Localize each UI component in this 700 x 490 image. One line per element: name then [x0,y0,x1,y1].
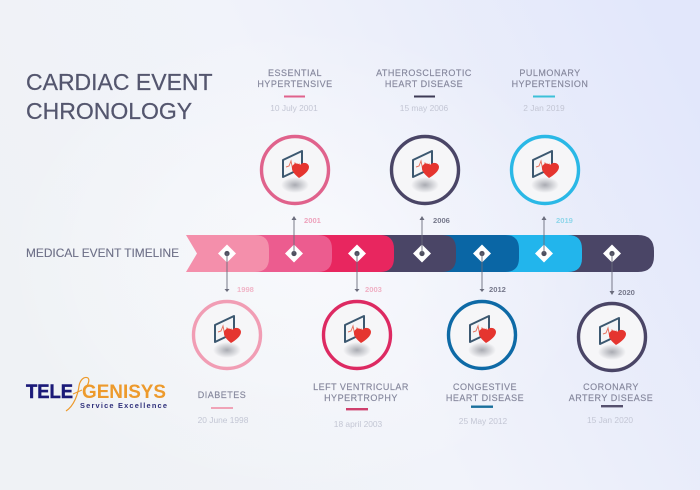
label: atherosclerotic heart disease: ATHEROSCLEROTIC [376,68,472,78]
label: congestive heart disease [446,382,524,426]
label: coronary artery disease: ARTERY DISEASE [569,393,653,403]
logo: Telegenisys [26,377,167,411]
label: essential hypertensive [257,68,333,113]
marker 2006 [413,216,450,262]
label: coronary artery disease: CORONARY [583,382,639,392]
marker 2020 [603,244,635,297]
segment: 2020 [560,235,654,272]
label: left ventricular hypertrophy [313,382,409,429]
label: pulmonary hypertension: HYPERTENSION [512,79,588,89]
marker 2012: 2012 [489,285,506,294]
marker 1998 [218,244,254,294]
segment: 1998 [186,235,269,272]
label: essential hypertensive: HYPERTENSIVE [257,79,333,89]
logo: Telegenisys: Service Excellence [80,401,167,410]
circle icon: pulmonary hypertension [512,136,578,204]
label: congestive heart disease: 25 May 2012 [459,416,508,426]
title: CARDIAC EVENT [26,69,213,95]
label: pulmonary hypertension [512,68,588,113]
marker 2001 [285,216,322,262]
label: coronary artery disease [569,382,653,425]
marker 2001: 2001 [304,216,322,225]
label: congestive heart disease: HEART DISEASE [446,393,524,403]
segment: 2001 [250,235,332,272]
circle icon: essential hypertensive [262,136,328,204]
timeline bar [186,235,654,272]
label: essential hypertensive: 10 July 2001 [270,103,318,113]
label: atherosclerotic heart disease: 15 may 2006 [400,103,449,113]
label: pulmonary hypertension: 2 Jan 2019 [523,103,565,113]
logo: Telegenisys: GENISYS [82,381,166,403]
segment: 2019 [500,235,582,272]
segment: 2003 [315,235,394,272]
marker 2012 [473,244,506,294]
label: congestive heart disease: CONGESTIVE [453,382,517,392]
segment: 2012 [440,235,519,272]
label: atherosclerotic heart disease: HEART DISEASE [385,79,463,89]
label: left ventricular hypertrophy: 18 april 2003 [334,419,383,429]
marker 1998: 1998 [237,285,254,294]
circle icon: atherosclerotic heart disease [392,136,458,204]
circle icon: coronary artery disease [578,304,646,370]
marker 2006: 2006 [433,216,450,225]
segment: 2006 [380,235,456,272]
label: diabetes [198,390,249,425]
label: left ventricular hypertrophy: HYPERTROPHY [324,393,398,403]
label: atherosclerotic heart disease [376,68,472,113]
circle icon: congestive heart disease [448,302,516,368]
label: pulmonary hypertension: PULMONARY [519,68,581,78]
marker 2019: 2019 [556,216,573,225]
title [26,69,213,124]
marker 2003 [348,244,382,294]
marker 2020: 2020 [618,288,635,297]
circle icon: left ventricular hypertrophy [324,302,390,368]
marker 2003: 2003 [365,285,382,294]
circle icon: diabetes [194,302,260,368]
logo: Telegenisys: TELE [26,381,73,403]
marker 2019 [535,216,573,262]
label: coronary artery disease: 15 Jan 2020 [587,415,633,425]
label: diabetes: DIABETES [198,390,246,400]
label: essential hypertensive: ESSENTIAL [268,68,322,78]
label: left ventricular hypertrophy: LEFT VENTRICULAR [313,382,409,392]
title: CHRONOLOGY [26,98,192,124]
label: diabetes: 20 June 1998 [198,415,249,425]
timeline label: MEDICAL EVENT TIMELINE [26,246,179,260]
